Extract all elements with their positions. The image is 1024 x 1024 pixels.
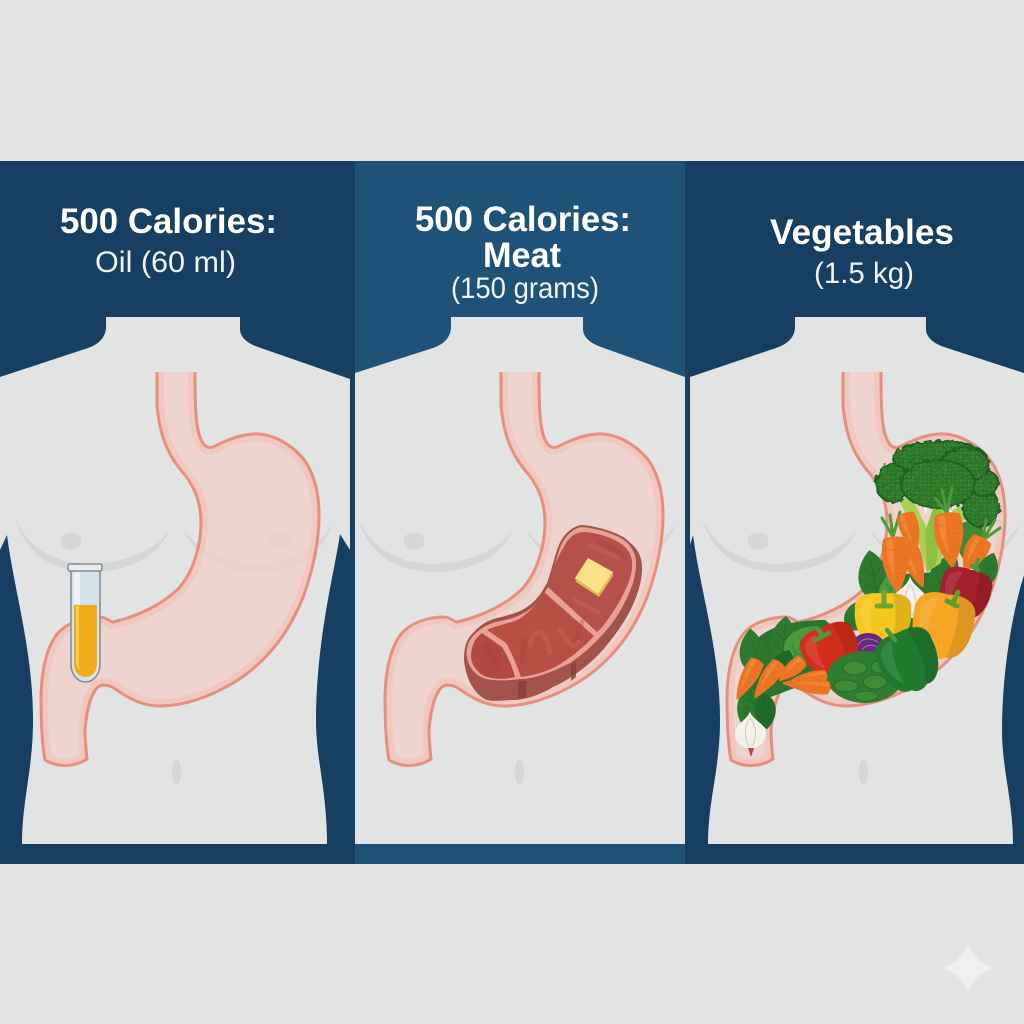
broccoli crown [876, 441, 999, 527]
stomach [385, 372, 663, 766]
heading: oil [60, 202, 277, 279]
butter pat [573, 558, 613, 597]
heading: oil: Oil (60 ml) [95, 246, 236, 279]
heading: vegetables: (1.5 kg) [814, 257, 914, 290]
carrots lower [729, 654, 831, 704]
icon: steak with butter [464, 526, 642, 701]
stomach [727, 372, 1005, 766]
icon: sparkle watermark [944, 943, 992, 992]
purple cabbage [852, 633, 884, 657]
dark red bell pepper [933, 560, 996, 625]
yellow bell pepper [855, 592, 911, 645]
panel: meat [355, 161, 685, 864]
torso silhouette [355, 317, 685, 844]
heading: vegetables: Vegetables [770, 213, 954, 252]
chest and navel details [358, 518, 676, 785]
panel: oil [0, 161, 355, 864]
stomach [41, 372, 319, 766]
red bell pepper [795, 617, 866, 683]
green stalks [898, 498, 985, 572]
carrots upper [881, 488, 1000, 594]
heading: meat: (150 grams) [451, 272, 599, 305]
green underlay [742, 570, 980, 724]
spinach pile [827, 651, 903, 703]
heading: meat: Meat [483, 236, 561, 275]
green bell pepper [870, 621, 948, 701]
icon: oil test tube [68, 564, 102, 682]
garlic bulb upper [892, 576, 928, 618]
spinach leaves [732, 547, 1004, 730]
chest and navel details [702, 518, 1020, 785]
panel: vegetables [685, 161, 1024, 864]
chest and navel details [15, 518, 333, 785]
heading: oil: 500 Calories: [60, 202, 277, 241]
heading: meat: 500 Calories: [415, 200, 631, 239]
torso silhouette [0, 317, 350, 844]
heading: vegetables [770, 213, 954, 290]
orange bell pepper [907, 589, 978, 664]
vegetables filling the stomach [729, 441, 1004, 757]
heading: meat [415, 200, 631, 305]
torso silhouette [690, 317, 1024, 844]
garlic bulb lower [735, 711, 766, 757]
